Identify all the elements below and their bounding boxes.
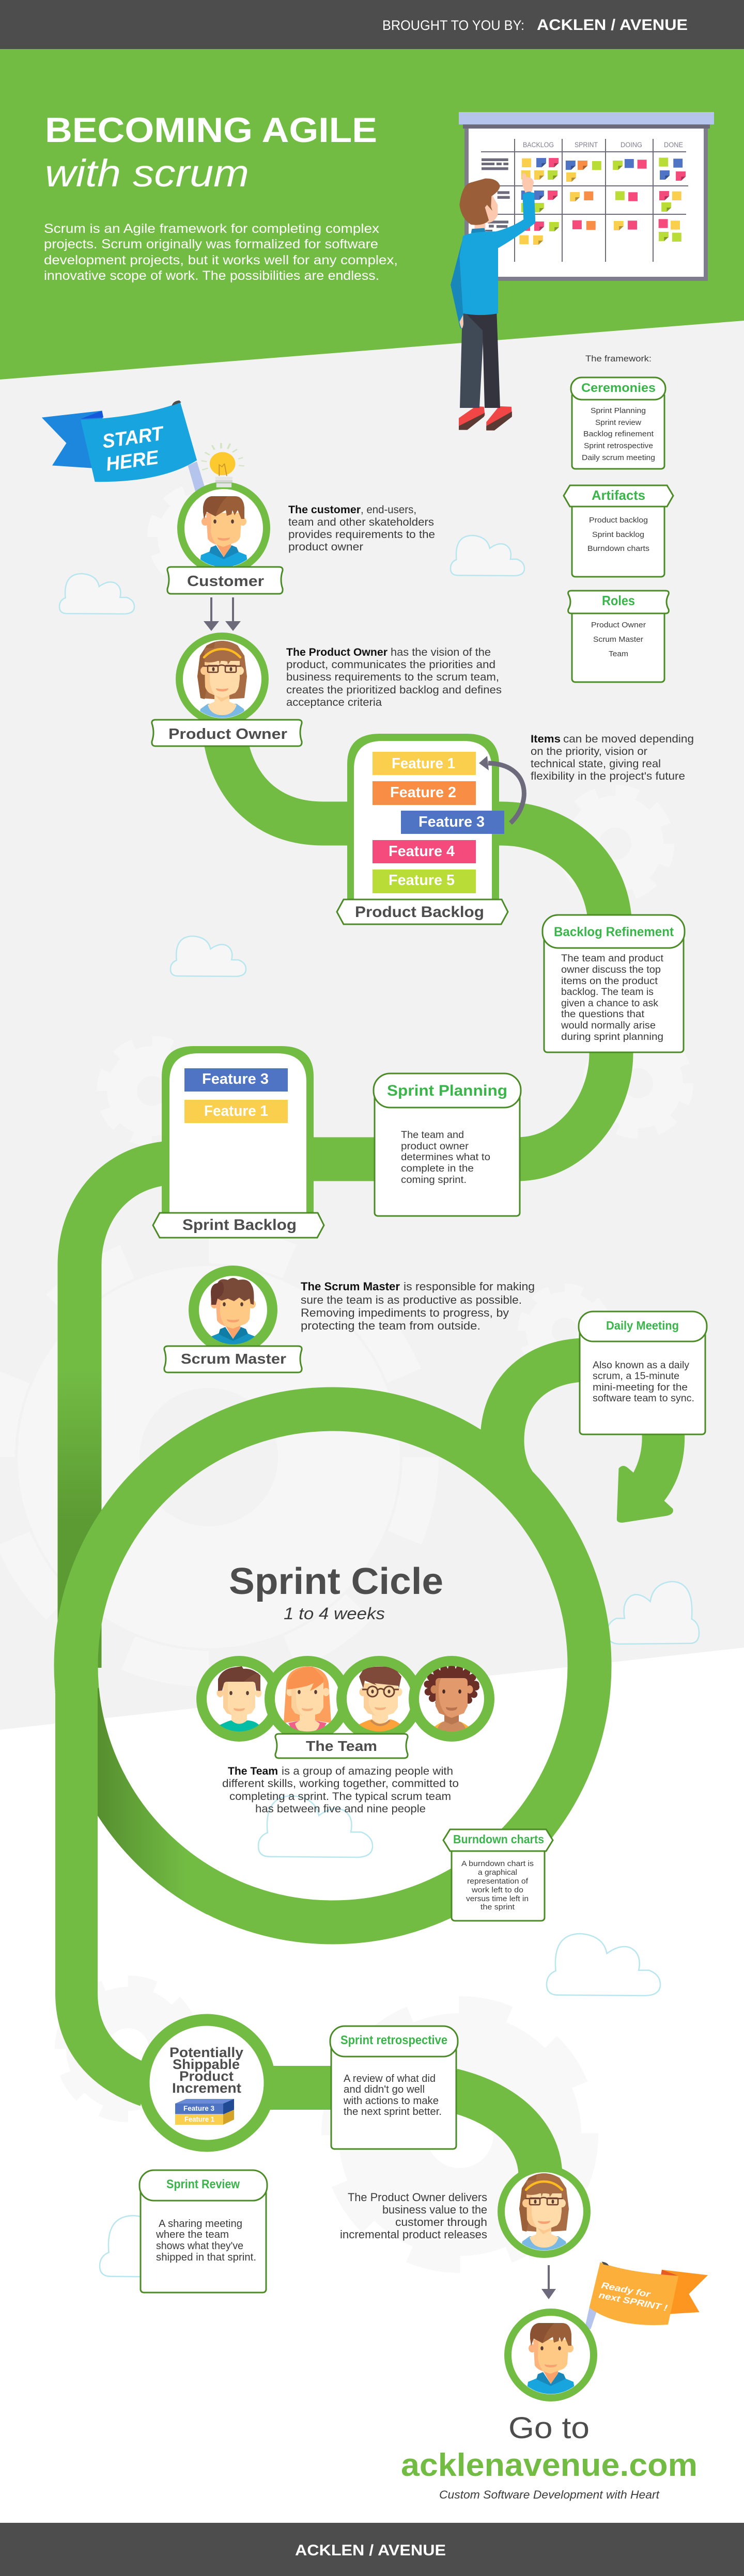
product owner description bbox=[286, 646, 502, 708]
avatar: scrum master bbox=[194, 1271, 272, 1351]
finish flag text: next SPRINT ! bbox=[598, 2290, 669, 2313]
avatar: customer receiving value bbox=[508, 2312, 594, 2398]
sprint cycle heading bbox=[229, 1561, 443, 1623]
label: the team bbox=[275, 1734, 408, 1758]
panel: artifacts: Burndown charts bbox=[587, 544, 649, 553]
panel: sprint planning: product owner bbox=[401, 1141, 469, 1152]
panel: daily meeting: mini-meeting for the bbox=[593, 1382, 688, 1393]
panel: roles: Team bbox=[609, 650, 628, 658]
team description: is a group of amazing people with bbox=[282, 1765, 453, 1777]
panel: backlog refinement: owner discuss the top bbox=[561, 965, 661, 975]
panel: sprint planning: determines what to bbox=[401, 1152, 490, 1163]
panel: roles: Roles bbox=[602, 593, 635, 608]
top bar bbox=[0, 0, 744, 49]
scrum board bbox=[459, 112, 714, 281]
panel: backlog refinement: would normally arise bbox=[561, 1020, 656, 1031]
panel: burndown charts: the sprint bbox=[481, 1903, 515, 1911]
scrum master description: The Scrum Master bbox=[301, 1280, 400, 1293]
panel: daily meeting: Also known as a daily bbox=[593, 1360, 690, 1371]
label: scrum master: Scrum Master bbox=[181, 1351, 286, 1367]
panel: sprint retrospective: the next sprint better. bbox=[344, 2106, 442, 2117]
customer description: team and other skateholders bbox=[288, 516, 434, 528]
panel: ceremonies: Backlog refinement bbox=[583, 430, 654, 438]
panel: burndown charts: A burndown chart is bbox=[461, 1859, 534, 1868]
arrows: customer to product owner bbox=[204, 597, 241, 631]
label: customer: Customer bbox=[187, 573, 264, 590]
panel: sprint retrospective: A review of what did bbox=[344, 2073, 436, 2084]
top bar: ACKLEN / AVENUE bbox=[537, 17, 688, 34]
scrum master description: Removing impediments to progress, by bbox=[301, 1306, 509, 1319]
panel: sprint planning: coming sprint. bbox=[401, 1175, 467, 1186]
team description: The Team bbox=[228, 1765, 278, 1777]
panel: sprint planning: Sprint Planning bbox=[387, 1082, 507, 1099]
items note: technical state, giving real bbox=[531, 758, 661, 770]
customer description bbox=[288, 504, 435, 553]
panel: backlog refinement: during sprint planning bbox=[561, 1032, 663, 1042]
panel: product backlog: Product Backlog bbox=[355, 904, 484, 921]
panel: burndown charts bbox=[443, 1829, 553, 1921]
top bar: BROUGHT TO YOU BY: bbox=[382, 18, 524, 33]
product owner description: product, communicates the priorities and bbox=[286, 659, 495, 671]
panel: backlog refinement: the questions that bbox=[561, 1009, 645, 1020]
intro paragraph: development projects, but it works well for any complex, bbox=[44, 253, 398, 267]
panel: sprint retrospective: and didn't go well bbox=[344, 2084, 425, 2095]
sprint cycle heading: Sprint Cicle bbox=[229, 1561, 443, 1602]
panel: artifacts: Sprint backlog bbox=[592, 530, 644, 539]
panel: backlog refinement: given a chance to ask bbox=[561, 998, 658, 1009]
start flag text: HERE bbox=[104, 447, 161, 476]
icon: light bulb bbox=[201, 443, 244, 487]
title: BECOMING AGILE bbox=[45, 110, 377, 150]
panel: sprint retrospective bbox=[330, 2026, 458, 2149]
arrow: product owner to customer bbox=[541, 2265, 556, 2299]
scrum master description: sure the team is as productive as possible. bbox=[301, 1293, 522, 1306]
panel: sprint review: A sharing meeting bbox=[159, 2218, 242, 2230]
panel: sprint planning: complete in the bbox=[401, 1163, 474, 1174]
panel: ceremonies: Sprint Planning bbox=[591, 406, 646, 415]
panel: sprint review: where the team bbox=[156, 2229, 229, 2240]
title bbox=[45, 110, 377, 195]
footer: ACKLEN / AVENUE bbox=[295, 2542, 446, 2559]
the team avatars bbox=[202, 1661, 489, 1736]
team description bbox=[222, 1765, 459, 1815]
intro paragraph bbox=[44, 222, 398, 283]
start flag text bbox=[101, 423, 166, 476]
arrow: reprioritise feature bbox=[479, 756, 524, 823]
scrum board: SPRINT bbox=[575, 141, 598, 149]
items note: Items bbox=[531, 733, 561, 745]
panel: roles: Scrum Master bbox=[593, 635, 643, 644]
product owner delivery note bbox=[340, 2191, 487, 2241]
panel: burndown charts: a graphical bbox=[478, 1868, 517, 1877]
intro paragraph: projects. Scrum originally was formalized for software bbox=[44, 237, 378, 251]
panel: roles: Product Owner bbox=[591, 621, 646, 629]
scrum master description: is responsible for making bbox=[404, 1280, 535, 1293]
panel: sprint backlog: Feature 1 bbox=[204, 1103, 268, 1119]
customer description: The customer bbox=[288, 504, 361, 516]
potentially shippable product increment: Shippable bbox=[173, 2057, 240, 2072]
product owner description: has the vision of the bbox=[391, 646, 491, 658]
panel: backlog refinement: Backlog Refinement bbox=[554, 925, 674, 939]
panel: artifacts: Product backlog bbox=[589, 516, 648, 525]
potentially shippable product increment: Feature 3 bbox=[183, 2104, 214, 2112]
panel: sprint retrospective: Sprint retrospective bbox=[340, 2033, 447, 2047]
panel: daily meeting: Daily Meeting bbox=[606, 1319, 679, 1332]
background gears bbox=[0, 488, 688, 2264]
avatar: product owner bbox=[179, 636, 265, 723]
panel: roles bbox=[568, 591, 669, 682]
panel: sprint planning: The team and bbox=[401, 1130, 464, 1141]
title: with scrum bbox=[45, 152, 249, 195]
panel: artifacts bbox=[564, 485, 673, 577]
flow path: daily meeting loop bbox=[502, 1360, 581, 1487]
flow path: top section bbox=[225, 738, 611, 1159]
team description: has between five and nine people bbox=[255, 1803, 426, 1815]
panel: sprint backlog: Feature 3 bbox=[202, 1071, 269, 1087]
clouds bbox=[59, 535, 699, 2277]
start flag bbox=[42, 401, 205, 492]
panel: ceremonies: Sprint retrospective bbox=[584, 441, 653, 450]
call to action: acklenavenue.com bbox=[401, 2447, 698, 2483]
scrum board: BACKLOG bbox=[523, 141, 554, 149]
finish flag text bbox=[598, 2280, 669, 2313]
panel: product backlog: Feature 5 bbox=[389, 872, 455, 889]
panel: burndown charts: Burndown charts bbox=[453, 1832, 544, 1846]
scrum master description bbox=[301, 1280, 535, 1332]
call to action: Custom Software Development with Heart bbox=[439, 2488, 660, 2501]
man at the board bbox=[451, 173, 535, 431]
panel: sprint review bbox=[140, 2170, 267, 2293]
potentially shippable product increment: Potentially bbox=[169, 2045, 243, 2060]
potentially shippable product increment: Product bbox=[179, 2068, 234, 2084]
finish flag text: Ready for bbox=[600, 2280, 652, 2300]
panel: daily meeting bbox=[579, 1311, 707, 1434]
panel: backlog refinement: backlog. The team is bbox=[561, 987, 654, 998]
potentially shippable product increment bbox=[144, 2020, 270, 2146]
panel: product backlog bbox=[337, 734, 508, 924]
panel: sprint review: shipped in that sprint. bbox=[156, 2252, 256, 2263]
panel: sprint planning bbox=[374, 1073, 521, 1216]
flow path: backlog to sprint bar bbox=[80, 1163, 165, 1369]
product owner description: business requirements to the scrum team, bbox=[286, 671, 499, 683]
label: product owner bbox=[152, 720, 302, 746]
label: scrum master bbox=[164, 1346, 302, 1372]
product owner delivery note: incremental product releases bbox=[340, 2228, 487, 2241]
product owner delivery note: business value to the bbox=[382, 2203, 487, 2216]
items note: can be moved depending bbox=[563, 733, 694, 745]
label: the team: The Team bbox=[306, 1738, 377, 1754]
items note: flexibility in the project's future bbox=[531, 770, 685, 782]
sprint ring bbox=[76, 1409, 590, 1922]
panel: backlog refinement: The team and product bbox=[561, 953, 664, 964]
team description: different skills, working together, committed to bbox=[222, 1778, 459, 1790]
flow path: bar to potentially shippable increment bbox=[55, 1687, 540, 2176]
potentially shippable product increment: Feature 1 bbox=[184, 2115, 214, 2123]
panel: artifacts: Artifacts bbox=[592, 487, 645, 503]
intro paragraph: Scrum is an Agile framework for completing complex bbox=[44, 222, 380, 236]
product owner delivery note: The Product Owner delivers bbox=[348, 2191, 487, 2204]
panel: burndown charts: work left to do bbox=[471, 1886, 523, 1894]
product owner description: The Product Owner bbox=[286, 646, 388, 658]
label: product owner: Product Owner bbox=[168, 726, 287, 742]
panel: daily meeting: scrum, a 15-minute bbox=[593, 1371, 679, 1382]
panel: sprint retrospective: with actions to make bbox=[343, 2095, 439, 2107]
customer description: provides requirements to the bbox=[288, 529, 435, 541]
customer description: , end-users, bbox=[361, 504, 416, 516]
arrow: daily meeting return bbox=[617, 1434, 685, 1523]
sprint cycle heading: 1 to 4 weeks bbox=[284, 1604, 385, 1623]
call to action: Go to bbox=[508, 2411, 590, 2445]
panel: sprint review: Sprint Review bbox=[166, 2177, 240, 2191]
flow path: shaded bar behind the sprint ring bbox=[58, 1368, 101, 1668]
panel: burndown charts: representation of bbox=[467, 1877, 529, 1886]
panel: ceremonies: Daily scrum meeting bbox=[582, 453, 655, 462]
panel: ceremonies: Sprint review bbox=[595, 418, 641, 427]
panel: ceremonies bbox=[571, 377, 665, 469]
panel: product backlog: Feature 1 bbox=[392, 755, 455, 772]
product owner description: creates the prioritized backlog and defines bbox=[286, 684, 502, 696]
customer description: product owner bbox=[288, 541, 363, 553]
panel: product backlog: Feature 3 bbox=[419, 814, 485, 830]
panel: daily meeting: software team to sync. bbox=[593, 1393, 694, 1404]
panel: sprint backlog bbox=[153, 1046, 324, 1238]
product owner description: acceptance criteria bbox=[286, 697, 382, 708]
panel: ceremonies: Ceremonies bbox=[581, 381, 656, 395]
intro paragraph: innovative scope of work. The possibilities are endless. bbox=[44, 268, 379, 283]
panel: product backlog: Feature 2 bbox=[390, 784, 456, 801]
start flag text: START bbox=[101, 423, 166, 453]
panel: backlog refinement bbox=[542, 915, 685, 1052]
potentially shippable product increment: Increment bbox=[172, 2080, 241, 2096]
call to action bbox=[401, 2411, 698, 2501]
avatar: product owner delivering bbox=[501, 2169, 587, 2255]
product owner delivery note: customer through bbox=[395, 2216, 487, 2229]
items note bbox=[531, 733, 694, 782]
panel: product backlog: Feature 4 bbox=[389, 843, 455, 860]
panel: burndown charts: versus time left in bbox=[466, 1894, 529, 1903]
scrum board: DOING bbox=[621, 141, 642, 149]
label: customer bbox=[167, 567, 283, 594]
items note: on the priority, vision or bbox=[531, 746, 647, 757]
green hero band bbox=[0, 49, 744, 380]
framework heading: The framework: bbox=[585, 354, 652, 364]
avatar: customer bbox=[181, 485, 267, 571]
panel: sprint backlog: Sprint Backlog bbox=[182, 1216, 297, 1234]
finish flag bbox=[584, 2262, 708, 2329]
footer bbox=[0, 2523, 744, 2576]
team description: completing a sprint. The typical scrum team bbox=[229, 1791, 451, 1803]
scrum board: DONE bbox=[664, 141, 683, 149]
scrum master description: protecting the team from outside. bbox=[301, 1319, 481, 1332]
panel: backlog refinement: items on the product bbox=[561, 976, 658, 987]
panel: sprint review: shows what they've bbox=[156, 2240, 243, 2252]
